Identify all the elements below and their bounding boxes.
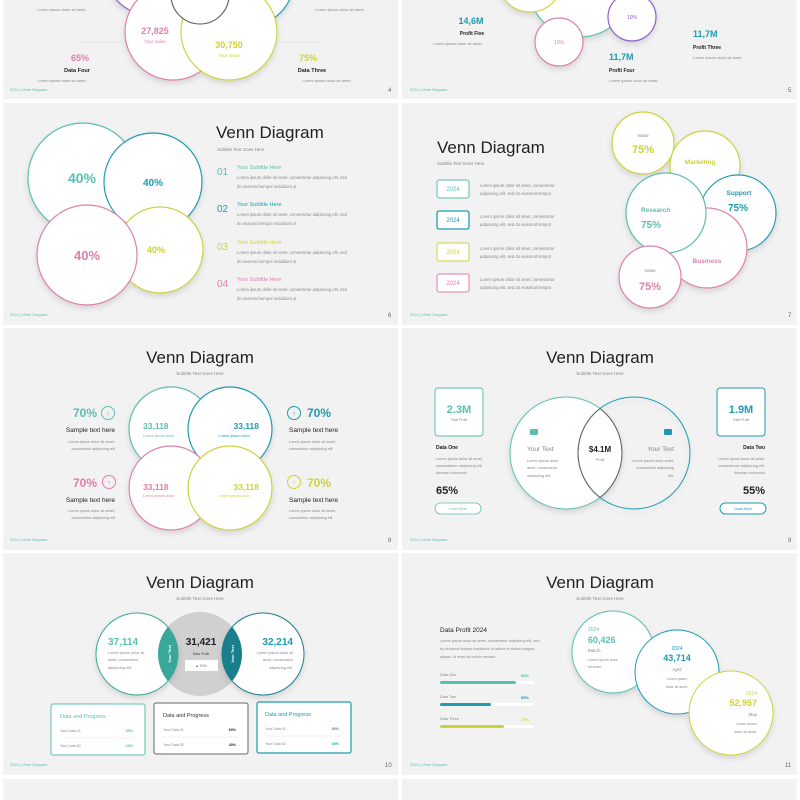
slide 8: 33,118: [233, 421, 259, 431]
slide 5 (partial): 10%: [627, 15, 638, 21]
slide 11: aliqua. Ut enim ad minim veniam.: [440, 655, 496, 659]
slide 11: Lorem ipsum dolor sit amet, consectetur adipiscing elit, sed: [440, 639, 540, 643]
slide 11: 2024: [671, 646, 683, 652]
slide 11: 43,714: [663, 653, 691, 663]
slide 9: Lorem ipsum dolor amet,: [632, 459, 674, 463]
slide 4 (partial): 27,825: [141, 26, 169, 36]
progress boxes: Your Data 02: [60, 744, 81, 748]
progress boxes: 20%: [332, 742, 340, 746]
title: Venn Diagram: [546, 573, 654, 592]
progress boxes: Data and Progress: [60, 714, 106, 720]
slide 8: 33,118: [233, 482, 259, 492]
slide 8: Lorem ipsum dolor: [219, 494, 251, 498]
slide 8: ↑: [292, 411, 296, 418]
list: [217, 165, 348, 301]
slide 4 (partial): 4: [388, 88, 392, 94]
slide 9: Total Profit: [733, 418, 749, 422]
slide 8: Lorem ipsum dolor: [219, 434, 251, 438]
list: 01: [217, 167, 229, 178]
slide 10: adipiscing elit.: [269, 666, 293, 670]
slide 4 (partial): 2024 | Venn Diagram: [10, 87, 48, 92]
slide 10: 31,421: [186, 637, 217, 648]
venn 2x2: [129, 387, 272, 530]
slide 5 (partial): [402, 0, 797, 99]
slide 11: April: [672, 667, 682, 672]
slide 11: do eiusmod tempor incididunt ut labore et dolore magna: [440, 647, 535, 651]
slide 10: Data Profit: [193, 652, 209, 656]
title: Venn Diagram: [546, 348, 654, 367]
year boxes: 2024: [446, 281, 460, 287]
slide 11: 11: [785, 763, 792, 769]
list: do eiusmod tempor incididunt ut: [237, 221, 297, 226]
slide 6: [3, 103, 398, 325]
slide 7: 75%: [639, 281, 661, 293]
slide 8: Subtitle Text Goes Here: [176, 371, 224, 376]
slide 6: 6: [388, 313, 392, 319]
slide 4 (partial): Lorem ipsum dolor sit amet.: [37, 7, 87, 12]
slide 9: consectetuer adipiscing elit.: [718, 464, 765, 468]
progress boxes: 20%: [126, 744, 134, 748]
slide 7: Lorem ipsum dolor sit amet, consectetur: [480, 246, 555, 251]
slide 8: ↑: [292, 480, 296, 487]
slide 11: Lorem ipsum dolor: [588, 658, 619, 662]
year boxes: 2024: [446, 250, 460, 256]
slide 9: 2024 | Venn Diagram: [410, 537, 448, 542]
slide 7: Lorem ipsum dolor sit amet, consectetur: [480, 183, 555, 188]
slide 10: 37,114: [108, 637, 138, 648]
slide 10: Your Text: [167, 644, 172, 663]
slide 9: Aenean commodo: [436, 471, 467, 475]
slide 9: elit.: [668, 474, 674, 478]
list: do eiusmod tempor incididunt ut: [237, 184, 297, 189]
progress boxes: 40%: [229, 743, 237, 747]
slide 9: 55%: [743, 485, 765, 497]
slide 4 (partial): Your Value: [144, 39, 166, 44]
slide 5 (partial): Lorem ipsum dolor sit amet.: [693, 55, 742, 60]
slide 10: 32,214: [262, 637, 293, 648]
side stats: 70%: [307, 406, 331, 420]
slide 4 (partial): 75%: [299, 53, 317, 63]
progress boxes: [51, 702, 351, 755]
list: Your Subtitle Here: [237, 240, 281, 246]
slide 8: Sample text here: [66, 497, 115, 504]
slide 9: 2.3M: [447, 404, 471, 416]
slide 11: Data Two: [440, 695, 456, 699]
title: Venn Diagram: [146, 348, 254, 367]
progress boxes: Data and Progress: [265, 712, 311, 718]
slide 9: Lorem ipsum dolor: [527, 459, 559, 463]
slide 5 (partial): Profit Four: [609, 68, 635, 74]
slide 6: 40%: [143, 178, 163, 189]
slide 8: [3, 328, 398, 550]
slide 7: Value: [637, 133, 649, 138]
side stats: 70%: [73, 476, 97, 490]
slide 5 (partial): 5: [788, 88, 792, 94]
side stats: 70%: [307, 476, 331, 490]
two-circle venn: [510, 397, 690, 509]
progress boxes: Your Data 01: [60, 729, 81, 733]
slide 7: Research: [641, 207, 670, 214]
slide 8: Lorem ipsum dolor sit amet,: [289, 509, 336, 513]
slide 11: Subtitle Text Goes Here: [576, 596, 624, 601]
slide 11: March: [588, 648, 601, 653]
slide 7: Business: [693, 258, 722, 265]
title: Venn Diagram: [437, 138, 545, 157]
side stats: [73, 406, 331, 490]
slide 11: 60,426: [588, 635, 616, 645]
slide 9: Subtitle Text Goes Here: [576, 371, 624, 376]
venn circles slide 5: [498, 0, 656, 66]
slide 9: Data One: [436, 445, 458, 451]
slide 7: 75%: [641, 220, 661, 231]
venn four circles: [28, 123, 203, 305]
slide 7: 7: [788, 313, 792, 319]
slide 4 (partial): Lorem ipsum dolor sit amet.: [315, 7, 365, 12]
slide 9: Profit: [596, 458, 605, 462]
slide 4 (partial): Your Value: [218, 53, 240, 58]
progress boxes: Your Data 02: [163, 743, 184, 747]
slide 4 (partial): Data Four: [64, 68, 91, 74]
progress bars: 80%: [521, 673, 529, 678]
overlapping circles: [572, 611, 773, 755]
slide 9: Lorem ipsum dolor sit amet,: [718, 457, 765, 461]
progress boxes: Data and Progress: [163, 713, 209, 719]
slide 8: consectetur adipiscing elit: [72, 447, 116, 451]
slide 11: 2024: [746, 691, 757, 697]
list: 04: [217, 279, 229, 290]
slide 10: 10: [385, 763, 392, 769]
year boxes: 2024: [446, 187, 460, 193]
three circle venn with lenses: [96, 612, 304, 696]
bottom partial slides: [3, 779, 797, 800]
list: Lorem ipsum dolor sit amet, consectetur adipiscing elit, sed: [237, 175, 348, 180]
list: 02: [217, 204, 229, 215]
slide 11: dolor sit amet.: [734, 730, 757, 734]
slide 8: Lorem ipsum dolor: [143, 434, 175, 438]
slide 8: Lorem ipsum dolor sit amet,: [68, 440, 115, 444]
slide 11: Lorem ipsum: [667, 677, 687, 681]
list: Your Subtitle Here: [237, 202, 281, 208]
slide 5 (partial): 11,7M: [609, 52, 634, 62]
title: Venn Diagram: [146, 573, 254, 592]
slide 6: 40%: [74, 248, 100, 263]
slide 9: Learn More: [449, 507, 467, 511]
slide 11: Data Profit 2024: [440, 627, 487, 634]
slide 9: Aenean commodo: [734, 471, 765, 475]
slide 9: Data Two: [743, 445, 765, 451]
year boxes: 2024: [446, 218, 460, 224]
slide 4 (partial): Lorem ipsum dolor sit amet.: [302, 78, 352, 83]
list: Lorem ipsum dolor sit amet, consectetur adipiscing elit, sed: [237, 287, 348, 292]
slide 8: 33,118: [143, 421, 169, 431]
slide 8: ↑: [107, 480, 111, 487]
list: 03: [217, 242, 229, 253]
list: do eiusmod tempor incididunt ut: [237, 296, 297, 301]
slide 11: 52,957: [729, 698, 757, 708]
progress bars: 70%: [521, 717, 529, 722]
slide 10: amet, consectetur: [108, 658, 139, 662]
title: Venn Diagram: [216, 123, 324, 142]
slide 8: Sample text here: [289, 427, 339, 434]
slide 6: 40%: [68, 170, 97, 186]
slide 11: Data One: [440, 673, 456, 677]
list: Lorem ipsum dolor sit amet, consectetur adipiscing elit, sed: [237, 250, 348, 255]
slide 6: 40%: [147, 245, 165, 255]
slide 7: adipiscing elit, sed do eiusmod tempor: [480, 254, 552, 259]
slide 11: Data Three: [440, 717, 459, 721]
slide 11: [402, 553, 797, 775]
slide 8: 2024 | Venn Diagram: [10, 537, 48, 542]
slide 7: Subtitle Text Goes Here: [437, 161, 485, 166]
slide 5 (partial): Lorem ipsum dolor sit amet.: [609, 78, 658, 83]
slide 5 (partial): Profit Three: [693, 45, 721, 51]
slide 11: 2024 | Venn Diagram: [410, 762, 448, 767]
slide 8: Lorem ipsum dolor sit amet,: [68, 509, 115, 513]
progress boxes: Your Data 01: [265, 727, 286, 731]
slide 7: Lorem ipsum dolor sit amet, consectetur: [480, 277, 555, 282]
slide 9: 9: [788, 538, 792, 544]
side stats: 70%: [73, 406, 97, 420]
slide 11: May: [748, 712, 758, 717]
year boxes: [437, 180, 469, 292]
slide 5 (partial): Profit Five: [460, 31, 484, 37]
slide 10: Your Text: [230, 644, 235, 663]
slide 7: adipiscing elit, sed do eiusmod tempor: [480, 285, 552, 290]
slide 4 (partial): [3, 0, 398, 99]
slide 7: [402, 103, 797, 325]
progress bars: [440, 673, 534, 728]
slide 10: Subtitle Text Goes Here: [176, 596, 224, 601]
list: Lorem ipsum dolor sit amet, consectetur adipiscing elit, sed: [237, 212, 348, 217]
slide 8: 8: [388, 538, 392, 544]
slide 8: consectetur adipiscing elit: [72, 516, 116, 520]
slide 8: 33,118: [143, 482, 169, 492]
slide 5 (partial): 2024 | Venn Diagram: [410, 87, 448, 92]
bubble cluster: [612, 112, 776, 308]
slide 9: Your Text: [527, 446, 554, 453]
slide 11: sit amet.: [588, 665, 602, 669]
slide 10: 2024 | Venn Diagram: [10, 762, 48, 767]
slide 10: Lorem ipsum dolor sit: [257, 651, 294, 655]
progress boxes: Your Data 02: [265, 742, 286, 746]
slide 6: Subtitle Text Goes Here: [217, 147, 265, 152]
slide 4 (partial): Data Three: [298, 68, 326, 74]
slide 9: consectetur adipiscing: [636, 466, 674, 470]
slide 7: Lorem ipsum dolor sit amet, consectetur: [480, 214, 555, 219]
progress bars: 55%: [521, 695, 529, 700]
slide 8: Sample text here: [66, 427, 115, 434]
slide 9: Your Text: [647, 446, 674, 453]
slide 9: adipiscing elit.: [527, 474, 551, 478]
slide 11: dolor sit amet.: [666, 685, 688, 689]
venn circles slide 4: [105, 0, 294, 80]
slide 5 (partial): 10%: [554, 40, 565, 46]
slide 9: Total Profit: [451, 418, 467, 422]
slide 9: [402, 328, 797, 550]
progress boxes: 60%: [126, 729, 134, 733]
slide 8: Lorem ipsum dolor sit amet,: [289, 440, 336, 444]
slide 10: amet, consectetur: [263, 658, 294, 662]
progress boxes: 60%: [229, 728, 237, 732]
list: Your Subtitle Here: [237, 277, 281, 283]
slide 8: consectetur adipiscing elit: [289, 447, 333, 451]
stat boxes: [435, 388, 483, 436]
slide 7: 2024 | Venn Diagram: [410, 312, 448, 317]
slide 7: adipiscing elit, sed do eiusmod tempor: [480, 222, 552, 227]
slide 4 (partial): Lorem ipsum dolor sit amet.: [37, 78, 87, 83]
progress boxes: 80%: [332, 727, 340, 731]
slide 8: ↑: [106, 411, 110, 418]
slide 8: Sample text here: [289, 497, 339, 504]
slide 7: Marketing: [685, 159, 715, 166]
slide 10: [3, 553, 398, 775]
slide 5 (partial): Lorem ipsum dolor sit amet.: [433, 41, 483, 46]
slide 8: consectetur adipiscing elit: [289, 516, 333, 520]
slide 9: Lorem ipsum dolor sit amet,: [436, 457, 483, 461]
slide 7: Support: [727, 190, 752, 197]
slide 7: adipiscing elit, sed do eiusmod tempor: [480, 191, 552, 196]
slide 5 (partial): 14,6M: [458, 16, 484, 26]
progress boxes: Your Data 01: [163, 728, 184, 732]
slide 6: 2024 | Venn Diagram: [10, 312, 48, 317]
slide 9: Learn More: [734, 507, 752, 511]
slide 10: ▲ 10%: [195, 664, 207, 668]
slide 9: 1.9M: [729, 404, 753, 416]
slide 9: amet, consectetur: [527, 466, 558, 470]
slide 7: 75%: [632, 144, 654, 156]
slide 4 (partial): 30,750: [215, 40, 243, 50]
slide 7: 75%: [728, 203, 748, 214]
slide 11: 2024: [588, 627, 599, 633]
list: Your Subtitle Here: [237, 165, 281, 171]
slide 9: $4.1M: [589, 445, 611, 454]
slide 5 (partial): 11,7M: [693, 29, 718, 39]
slide 9: consectetuer adipiscing elit.: [436, 464, 483, 468]
slide 8: Lorem ipsum dolor: [143, 494, 175, 498]
slide 10: adipiscing elit.: [108, 666, 132, 670]
slide 9: 65%: [436, 485, 458, 497]
slide 10: Lorem ipsum dolor sit: [108, 651, 145, 655]
slide 11: Lorem ipsum: [736, 722, 757, 726]
slide 7: Value: [644, 268, 656, 273]
list: do eiusmod tempor incididunt ut: [237, 259, 297, 264]
slide 4 (partial): 65%: [71, 53, 89, 63]
